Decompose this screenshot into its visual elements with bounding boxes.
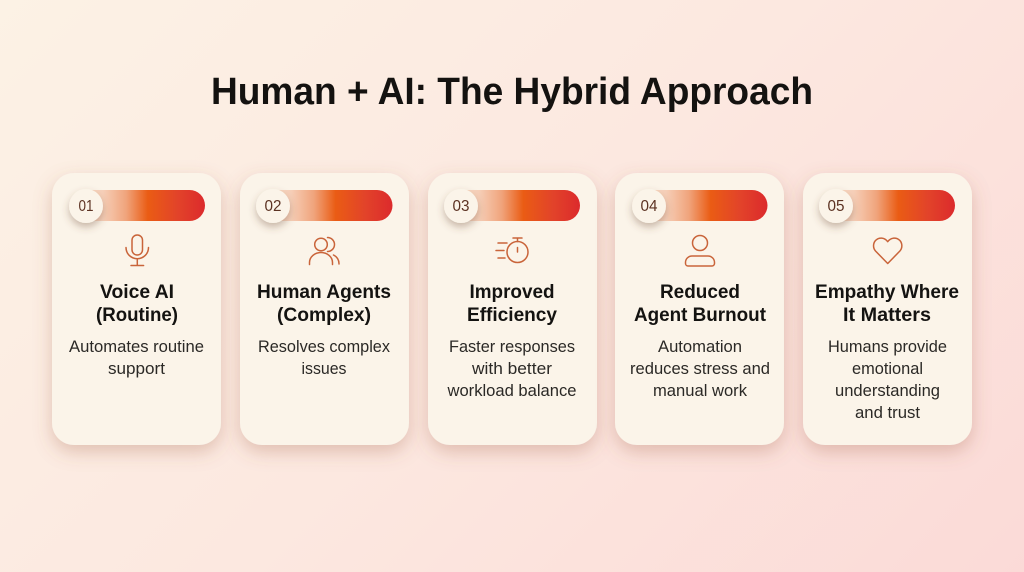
description 03: Faster responses — [449, 338, 575, 356]
description 05: Humans provide — [828, 338, 947, 356]
number badge 05 — [819, 189, 853, 223]
description 05: and trust — [855, 404, 920, 422]
number badge 05: 05 — [828, 198, 844, 215]
icon: two people — [310, 238, 339, 264]
description 02 — [258, 338, 390, 378]
description 02: Resolves complex — [258, 338, 390, 356]
description 03 — [446, 338, 576, 400]
icon: microphone — [126, 235, 148, 266]
heading 04 — [634, 281, 766, 326]
description 05 — [828, 338, 947, 422]
icon: stopwatch — [496, 238, 528, 262]
heading 03 — [467, 281, 557, 326]
panel: card 03 Improved Efficiency — [428, 173, 597, 445]
description 04: manual work — [653, 382, 748, 400]
heading 01: Voice AI — [100, 281, 174, 303]
progress pill 05 — [820, 190, 955, 221]
panel: card 01 Voice AI — [52, 173, 221, 445]
number badge 03 — [444, 189, 478, 223]
heading 03: Improved — [470, 281, 554, 303]
heading 01: (Routine) — [96, 304, 178, 326]
heading 02 — [257, 281, 391, 326]
icon: person — [686, 236, 715, 266]
progress pill 01 — [69, 190, 205, 221]
description 04 — [630, 338, 770, 400]
icon: heart — [874, 238, 902, 264]
description 03: with better — [471, 360, 553, 378]
number badge 04: 04 — [640, 198, 658, 215]
number badge 01: 01 — [78, 198, 94, 215]
description 02: issues — [302, 360, 346, 378]
heading 03: Efficiency — [467, 304, 557, 326]
heading 02: (Complex) — [277, 304, 371, 326]
heading 04: Agent Burnout — [634, 304, 766, 326]
description 04: Automation — [658, 338, 742, 356]
panel: card 02 Human Agents — [240, 173, 409, 445]
description 01: support — [108, 360, 165, 378]
number badge 02: 02 — [264, 198, 282, 215]
description 03: workload balance — [446, 382, 576, 400]
progress pill 02 — [257, 190, 392, 221]
title: Human + AI: The Hybrid Approach — [211, 71, 813, 113]
description 05: emotional — [852, 360, 923, 378]
number badge 04 — [632, 189, 666, 223]
number badge 03: 03 — [452, 198, 470, 215]
heading 02: Human Agents — [257, 281, 391, 303]
heading 01 — [96, 281, 178, 326]
description 04: reduces stress and — [630, 360, 770, 378]
description 01: Automates routine — [69, 338, 204, 356]
heading 05: It Matters — [843, 304, 931, 326]
description 05: understanding — [835, 382, 940, 400]
panel: card 05 Empathy Where It Matters — [803, 173, 972, 445]
heading 05: Empathy Where — [815, 281, 959, 303]
number badge 01 — [69, 189, 103, 223]
progress pill 04 — [632, 190, 768, 221]
progress pill 03 — [445, 190, 580, 221]
description 01 — [69, 338, 204, 378]
panel: card 04 Reduced Agent Burnout — [615, 173, 784, 445]
number badge 02 — [256, 189, 290, 223]
heading 04: Reduced — [660, 281, 740, 303]
heading 05 — [815, 281, 959, 326]
